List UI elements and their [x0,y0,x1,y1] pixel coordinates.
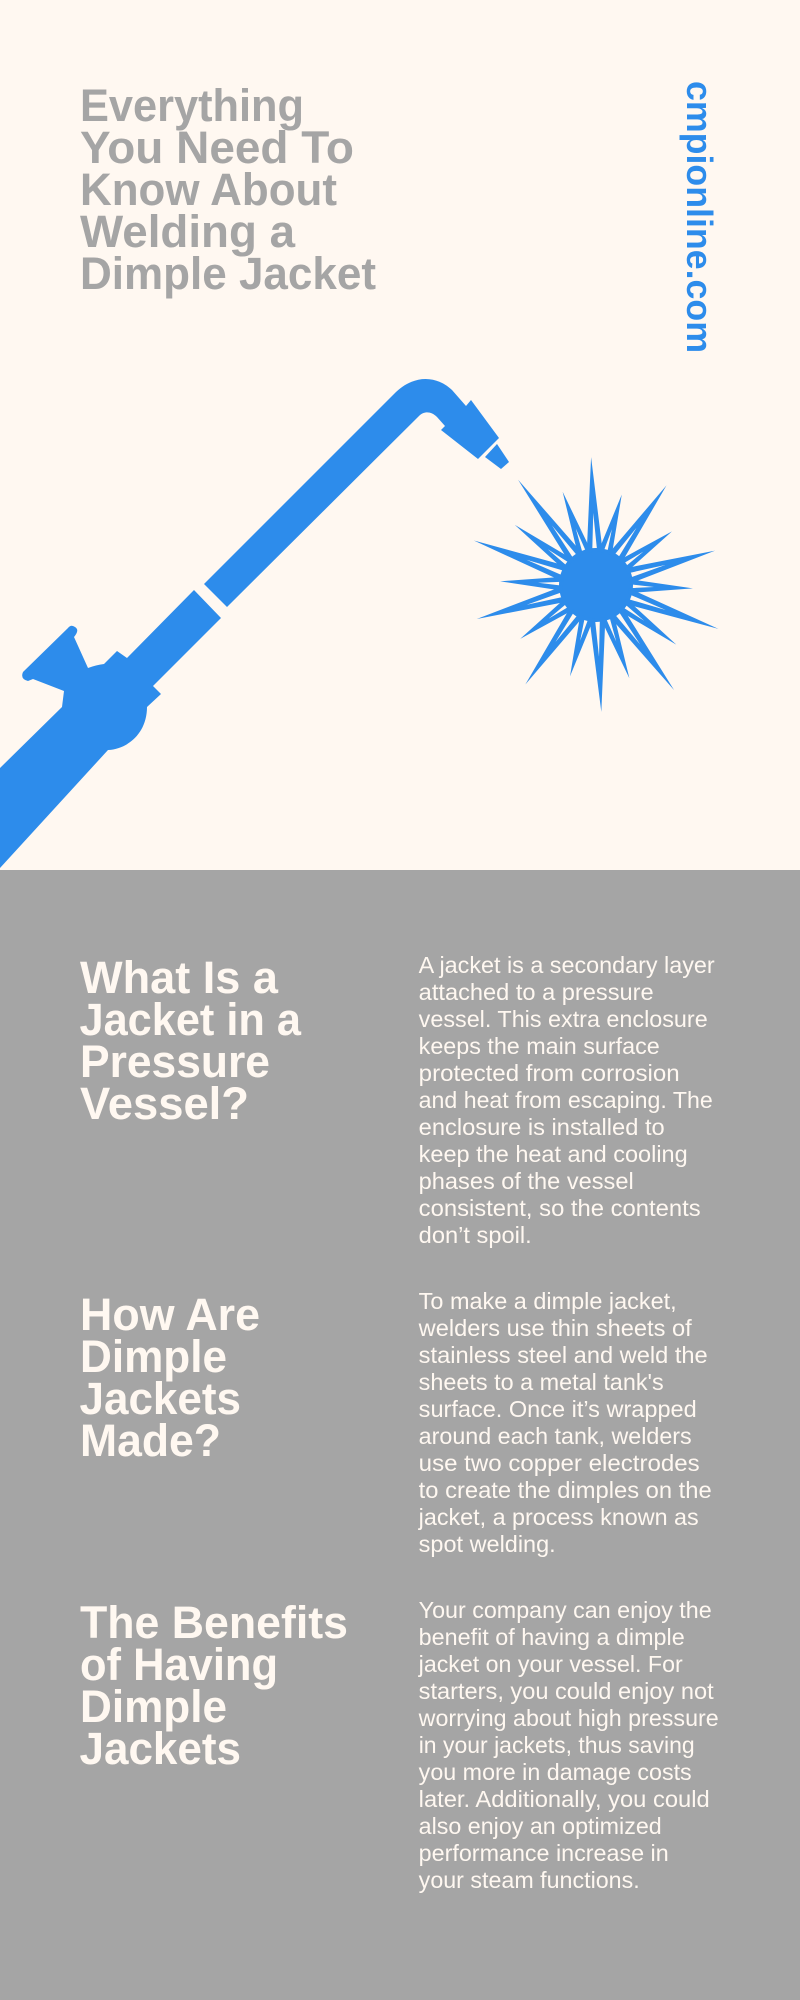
torch handle and valve [0,590,221,868]
heading: how are dimple jackets made [80,1289,260,1466]
body text: what is a jacket: attached to a pressure [419,979,654,1005]
heading: how are dimple jackets made: Made? [80,1415,221,1466]
body text: what is a jacket: A jacket is a secondary layer [419,952,715,978]
heading: how are dimple jackets made: Dimple [80,1331,227,1382]
icon: welding torch [0,379,509,868]
body text: benefits of dimple jackets: benefit of having a dimple [419,1624,685,1650]
title [80,80,376,299]
body text: how are dimple jackets made: sheets to a metal tank's [419,1369,664,1395]
title: Everything [80,80,304,131]
body text: how are dimple jackets made [418,1288,712,1557]
heading: benefits of dimple jackets: of Having [80,1639,278,1690]
panel: how are dimple jackets made [80,1288,712,1557]
body text: what is a jacket: protected from corrosion [419,1060,680,1086]
panel: benefits of dimple jackets [80,1597,719,1893]
heading: what is a jacket: Pressure [80,1036,270,1087]
heading: what is a jacket [80,952,302,1129]
body text: what is a jacket: vessel. This extra enclosure [419,1006,708,1032]
icon: welding spark [471,457,721,712]
panel: what is a jacket [80,952,715,1248]
body text: how are dimple jackets made: To make a dimple jacket, [419,1288,677,1314]
body text: benefits of dimple jackets: later. Additionally, you could [419,1786,710,1812]
body text: benefits of dimple jackets: worrying about high pressure [418,1705,719,1731]
heading: what is a jacket: Jacket in a [80,994,302,1045]
heading: benefits of dimple jackets: Dimple [80,1681,227,1732]
body text: benefits of dimple jackets: Your company can enjoy the [419,1597,712,1623]
body text: what is a jacket: and heat from escaping. The [419,1087,713,1113]
title: Know About [80,164,337,215]
body text: how are dimple jackets made: use two copper electrodes [419,1450,700,1476]
body text: what is a jacket: keep the heat and cooling [419,1141,688,1167]
title: Welding a [80,206,296,257]
heading: how are dimple jackets made: Jackets [80,1373,241,1424]
body text: benefits of dimple jackets: jacket on your vessel. For [418,1651,683,1677]
heading: what is a jacket: What Is a [80,952,279,1003]
body text: how are dimple jackets made: jacket, a process known as [418,1504,699,1530]
body text: benefits of dimple jackets: you more in damage costs [419,1759,692,1785]
body text: benefits of dimple jackets: also enjoy an optimized [419,1813,662,1839]
panel: bottom grey background [0,870,800,2000]
torch upper pipe and nozzle [204,379,499,607]
heading: benefits of dimple jackets: The Benefits [80,1597,348,1648]
heading: what is a jacket: Vessel? [80,1078,249,1129]
panel: top cream background [0,0,800,870]
body text: how are dimple jackets made: around each tank, welders [419,1423,692,1449]
heading: how are dimple jackets made: How Are [80,1289,260,1340]
body text: what is a jacket: phases of the vessel [419,1168,634,1194]
torch tip [485,444,509,469]
heading: benefits of dimple jackets: Jackets [80,1723,241,1774]
body text: how are dimple jackets made: welders use thin sheets of [418,1315,692,1341]
title: You Need To [80,122,354,173]
body text: benefits of dimple jackets: starters, you could enjoy not [419,1678,714,1704]
body text: what is a jacket [419,952,715,1248]
body text: what is a jacket: enclosure is installed to [419,1114,665,1140]
body text: what is a jacket: keeps the main surface [419,1033,660,1059]
body text: benefits of dimple jackets: performance increase in [419,1840,669,1866]
body text: how are dimple jackets made: stainless steel and weld the [419,1342,708,1368]
body text: what is a jacket: don’t spoil. [419,1222,532,1248]
body text: benefits of dimple jackets: in your jackets, thus saving [419,1732,695,1758]
website url, rotated: cmpionline.com [679,81,720,353]
body text: how are dimple jackets made: spot welding. [419,1531,556,1557]
title: Dimple Jacket [80,248,376,299]
body text: benefits of dimple jackets [418,1597,719,1893]
body text: benefits of dimple jackets: your steam functions. [419,1867,640,1893]
body text: what is a jacket: consistent, so the contents [419,1195,701,1221]
body text: how are dimple jackets made: surface. Once it’s wrapped [419,1396,697,1422]
heading: benefits of dimple jackets [80,1597,348,1774]
body text: how are dimple jackets made: to create the dimples on the [419,1477,712,1503]
